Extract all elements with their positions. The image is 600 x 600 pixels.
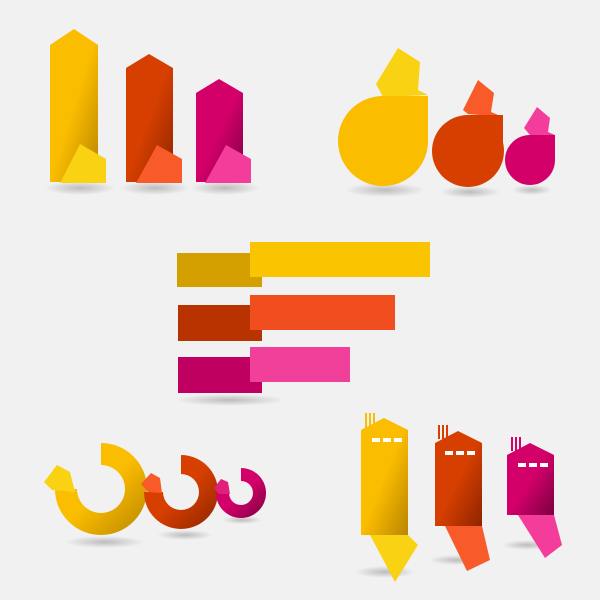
panel: building tags bbox=[355, 413, 562, 582]
panel: circle tags bbox=[338, 48, 555, 198]
panel: vertical arrow bars bbox=[45, 29, 260, 195]
panel: horizontal bars bbox=[175, 242, 430, 406]
panel: ring arrows bbox=[44, 443, 266, 548]
